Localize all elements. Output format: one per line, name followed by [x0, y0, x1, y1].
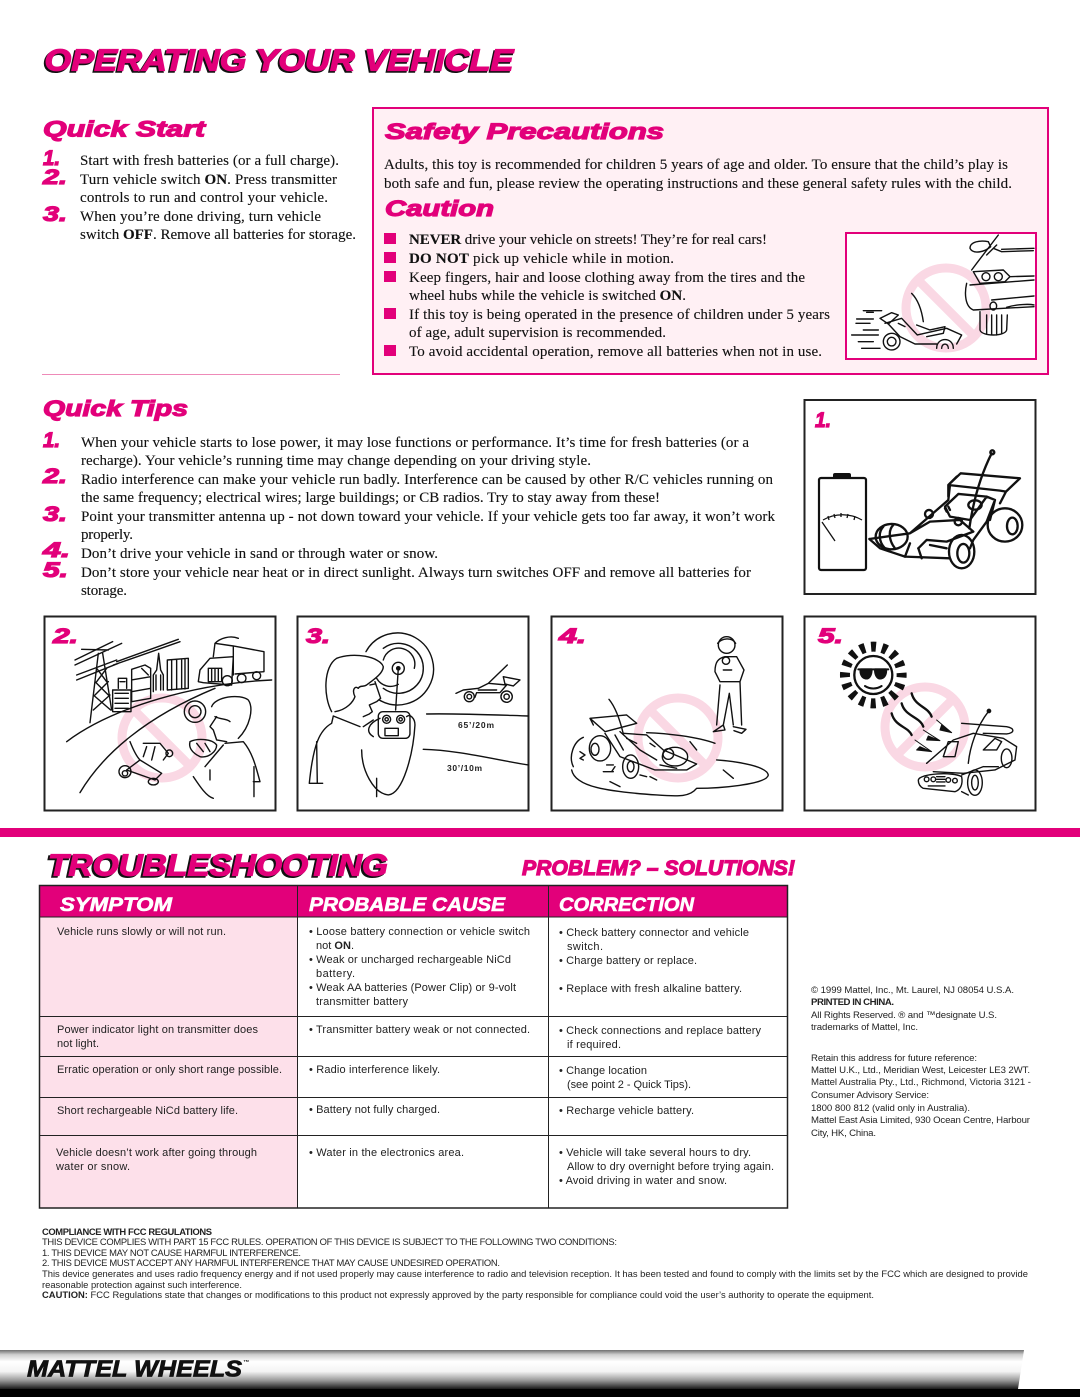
quick start steps text [80, 153, 356, 243]
correction column: (see point 2 - Quick Tips). [567, 1079, 691, 1091]
table headers: PROBABLE CAUSE [309, 895, 506, 916]
panel: safety precautions [373, 108, 1048, 374]
correction column: • Replace with fresh alkaline battery. [559, 983, 742, 995]
probable cause column: transmitter battery [316, 996, 408, 1008]
logo: mattel wheels: MATTEL WHEELS [27, 1356, 243, 1382]
title: troubleshooting: TROUBLESHOOTING [48, 848, 388, 882]
title: operating your vehicle: OPERATING YOUR VEHICLE [43, 44, 513, 79]
correction column: • Recharge vehicle battery. [559, 1105, 694, 1117]
heading: caution: Caution [385, 196, 494, 221]
symptom column: water or snow. [55, 1161, 130, 1173]
caution list text [409, 232, 830, 360]
symptom column: Erratic operation or only short range possible. [57, 1064, 282, 1076]
correction column: • Vehicle will take several hours to dry. [559, 1147, 751, 1159]
symptom column [55, 926, 282, 1173]
heading: quick start: Quick Start [43, 116, 207, 142]
probable cause column: • Weak or uncharged rechargeable NiCd [309, 954, 511, 966]
tip numbers: 4. [41, 539, 70, 562]
probable cause column: • Radio interference likely. [309, 1064, 440, 1076]
illustration panel 1: low battery and car [804, 400, 1036, 594]
correction column: switch. [567, 941, 603, 953]
copyright and address notes: Mattel Australia Pty., Ltd., Richmond, Victoria 3121 - [811, 1077, 1031, 1088]
copyright and address notes: trademarks of Mattel, Inc. [811, 1022, 918, 1033]
probable cause column: • Water in the electronics area. [309, 1147, 464, 1159]
FCC compliance text: COMPLIANCE WITH FCC REGULATIONS [42, 1226, 212, 1237]
probable cause column: • Battery not fully charged. [309, 1104, 440, 1116]
panel: quick start [42, 116, 356, 243]
tips text: Radio interference can make your vehicle run badly. Interference can be caused by other R/C vehicles running on [81, 472, 774, 488]
step numbers: 2. [42, 166, 67, 189]
FCC compliance text: CAUTION: FCC Regulations state that changes or modifications to this product not expressly approved by the party responsible for compliance could void the user’s authority to operate the equipment. [42, 1289, 874, 1300]
footer band with logo [0, 1350, 1080, 1397]
illustration panel 2: interference: 2. [52, 625, 78, 648]
probable cause column [309, 926, 530, 1159]
tip numbers [41, 429, 70, 582]
caution list text: wheel hubs while the vehicle is switched ON. [409, 288, 686, 304]
correction column: if required. [567, 1039, 621, 1051]
quick start steps text: controls to run and control your vehicle. [80, 190, 328, 206]
probable cause column: • Transmitter battery weak or not connected. [309, 1024, 530, 1036]
logo: mattel wheels: ™ [243, 1359, 249, 1366]
copyright and address notes: Retain this address for future reference: [811, 1053, 977, 1064]
step numbers: 1. [43, 147, 60, 170]
caution list text: Keep fingers, hair and loose clothing away from the tires and the [409, 270, 805, 286]
panel: quick tips [41, 396, 776, 599]
caution list text: If this toy is being operated in the presence of children under 5 years [409, 307, 830, 323]
distance labels: 30’/10m [447, 763, 482, 773]
title: operating your vehicle: OPERATING YOUR VEHICLE [44, 42, 515, 78]
FCC compliance text [42, 1226, 1028, 1300]
tips text: properly. [81, 527, 133, 543]
copyright and address notes: Consumer Advisory Service: [811, 1090, 929, 1101]
tips text [81, 435, 776, 599]
copyright and address notes: 1800 800 812 (valid only in Australia). [811, 1103, 970, 1114]
symptom column: Vehicle runs slowly or will not run. [57, 926, 226, 938]
probable cause column: • Loose battery connection or vehicle switch [309, 926, 530, 938]
correction column: • Charge battery or replace. [559, 955, 697, 967]
step numbers: 3. [43, 203, 67, 226]
FCC compliance text: 1. THIS DEVICE MAY NOT CAUSE HARMFUL INTERFERENCE. [42, 1247, 301, 1258]
correction column: • Check battery connector and vehicle [559, 927, 749, 939]
FCC compliance text: 2. THIS DEVICE MUST ACCEPT ANY HARMFUL INTERFERENCE THAT MAY CAUSE UNDESIRED OPERATION. [42, 1257, 500, 1268]
correction column: • Check connections and replace battery [559, 1025, 762, 1037]
caution list text: DO NOT pick up vehicle while in motion. [409, 251, 674, 267]
quick start steps text: When you’re done driving, turn vehicle [80, 209, 321, 225]
symptom column: not light. [57, 1038, 99, 1050]
correction column: Allow to dry overnight before trying again. [567, 1161, 774, 1173]
tip numbers: 5. [43, 559, 68, 582]
quick start steps text: Start with fresh batteries (or a full charge). [80, 153, 339, 169]
distance labels [447, 720, 494, 773]
illustration panel 5: heat and sunlight [804, 616, 1036, 810]
copyright and address notes: © 1999 Mattel, Inc., Mt. Laurel, NJ 08054 U.S.A. [811, 985, 1014, 996]
illustration panel 2: interference [44, 616, 276, 810]
caution list text: To avoid accidental operation, remove all batteries when not in use. [409, 344, 822, 360]
illustration panel 3: antenna range: 3. [306, 625, 330, 648]
symptom column: Vehicle doesn’t work after going through [56, 1147, 257, 1159]
copyright and address notes [811, 985, 1031, 1139]
correction column: • Avoid driving in water and snow. [559, 1175, 727, 1187]
copyright and address notes: All Rights Reserved. ® and ™designate U.S. [811, 1010, 997, 1021]
tips text: recharge). Your vehicle’s running time may change depending on your driving style. [81, 453, 591, 469]
illustration panel 5: heat and sunlight: 5. [818, 625, 843, 648]
tips text: Don’t store your vehicle near heat or in direct sunlight. Always turn switches OFF and remove all batteries for [81, 565, 751, 581]
tip numbers: 2. [42, 465, 67, 488]
table headers: SYMPTOM [60, 895, 173, 916]
symptom column: Short rechargeable NiCd battery life. [57, 1105, 238, 1117]
table headers [60, 895, 695, 916]
illustration panel 1: low battery and car: 1. [815, 409, 831, 432]
title: troubleshooting: TROUBLESHOOTING [46, 849, 386, 884]
tips text: When your vehicle starts to lose power, it may lose functions or performance. It’s time for fresh batteries (or a [81, 435, 749, 451]
correction column [559, 927, 774, 1187]
caution bullets [384, 233, 396, 356]
tips text: Don’t drive your vehicle in sand or through water or snow. [81, 546, 438, 562]
tip numbers: 1. [43, 429, 60, 452]
illustration panel 3: antenna range [298, 616, 528, 810]
FCC compliance text: THIS DEVICE COMPLIES WITH PART 15 FCC RULES. OPERATION OF THIS DEVICE IS SUBJECT TO THE FOLLOWING TWO CONDITIONS: [42, 1236, 617, 1247]
probable cause column: • Weak AA batteries (Power Clip) or 9-volt [309, 982, 516, 994]
tips text: storage. [81, 583, 127, 599]
illustration panel 4: water and sand: 4. [557, 625, 586, 648]
copyright and address notes: City, HK, China. [811, 1128, 876, 1139]
copyright and address notes: Mattel East Asia Limited, 930 Ocean Centre, Harbour [811, 1115, 1031, 1126]
probable cause column: battery. [316, 968, 355, 980]
copyright and address notes: PRINTED IN CHINA. [811, 997, 894, 1008]
step numbers [42, 147, 67, 226]
copyright and address notes: Mattel U.K., Ltd., Meridian West, Leicester LE3 2WT. [811, 1065, 1030, 1076]
symptom column: Power indicator light on transmitter does [57, 1024, 258, 1036]
illustration panel 4: water and sand [552, 616, 782, 810]
FCC compliance text: This device generates and uses radio frequency energy and if not used properly may cause interference to radio and television reception. It has been tested and found to comply with the limits set by the FCC which are designed to provide [42, 1268, 1028, 1279]
table grid [40, 886, 788, 1208]
caution list text: NEVER drive your vehicle on streets! They’re for real cars! [409, 232, 767, 248]
correction column: • Change location [559, 1065, 647, 1077]
quick start steps text: switch OFF. Remove all batteries for storage. [80, 227, 356, 243]
tips text: Point your transmitter antenna up - not down toward your vehicle. If your vehicle gets too far away, it won’t work [81, 509, 776, 525]
table headers: CORRECTION [559, 895, 695, 916]
illustration: do not drive on streets [846, 233, 1036, 359]
heading: safety precautions: Safety Precautions [385, 119, 664, 144]
troubleshooting table [40, 886, 788, 1208]
safety intro text: Adults, this toy is recommended for children 5 years of age and older. To ensure that the child’s play is [384, 157, 1008, 173]
distance labels: 65’/20m [458, 720, 494, 730]
subtitle: problem solutions: PROBLEM? – SOLUTIONS! [522, 857, 795, 880]
tips text: the same frequency; electrical wires; large buildings; or CB radios. Try to stay away from these! [81, 490, 660, 506]
safety intro text [384, 157, 1012, 192]
quick start steps text: Turn vehicle switch ON. Press transmitter [80, 172, 337, 188]
safety intro text: both safe and fun, please review the operating instructions and these general safety rules with the child. [384, 176, 1012, 192]
probable cause column: not ON. [316, 940, 354, 952]
caution list text: of age, adult supervision is recommended. [409, 325, 666, 341]
heading: quick tips: Quick Tips [43, 396, 188, 421]
FCC compliance text: reasonable protection against such interference. [42, 1279, 242, 1290]
tip numbers: 3. [43, 503, 67, 526]
